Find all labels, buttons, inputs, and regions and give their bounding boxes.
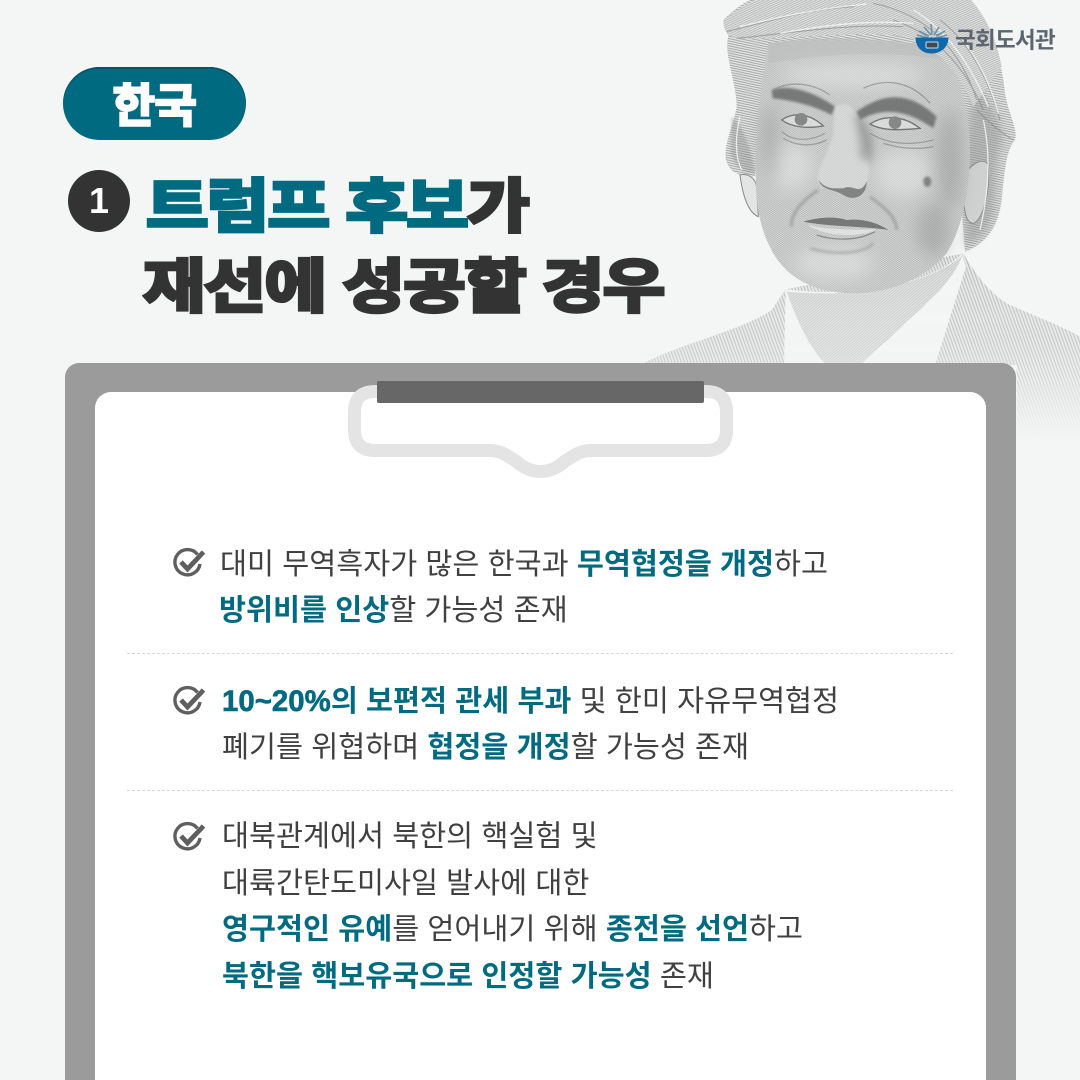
item 2 text: 10~20%의 보편적 관세 부과 및 한미 자유무역협정	[222, 678, 839, 720]
smile folds	[792, 190, 897, 230]
check icon 2	[173, 686, 206, 715]
item 1 text: 대미 무역흑자가 많은 한국과 무역협정을 개정하고	[220, 541, 828, 583]
eye bags and wrinkles	[773, 83, 933, 148]
item 2	[173, 678, 839, 766]
portrait illustration	[644, 0, 1080, 424]
mouth	[803, 218, 888, 239]
nose	[818, 104, 873, 198]
number badge	[68, 170, 130, 232]
category pill	[63, 67, 246, 140]
hair shadow side	[965, 83, 1003, 248]
item 3	[173, 813, 803, 995]
face	[756, 40, 970, 293]
item 3: 영구적인 유예를 얻어내기 위해 종전을 선언하고	[222, 906, 803, 948]
title	[142, 159, 664, 324]
hair strands	[727, 3, 1013, 140]
national assembly library logo	[916, 23, 1056, 55]
clipboard panel	[65, 363, 1016, 1080]
item 1: 방위비를 인상할 가능성 존재	[219, 587, 568, 629]
check icon 1	[173, 548, 206, 577]
item 2: 폐기를 위협하며 협정을 개정할 가능성 존재	[222, 724, 749, 766]
check icon 3	[173, 822, 206, 851]
forehead band	[768, 38, 943, 63]
logo text: 국회도서관	[955, 23, 1055, 55]
chin	[810, 243, 873, 253]
eyes	[782, 113, 920, 130]
suit and shirt	[644, 254, 1080, 424]
cheek highlights	[767, 62, 932, 280]
item 1	[173, 541, 828, 629]
cheek mole shadow	[923, 176, 931, 187]
clipboard paper	[95, 392, 986, 1080]
item 3 text: 대북관계에서 북한의 핵실험 및	[222, 813, 598, 855]
hair back	[723, 0, 1016, 252]
category label: 한국	[113, 70, 196, 136]
badge number: 1	[89, 180, 109, 221]
clipboard clip	[348, 381, 733, 478]
eyebrows	[772, 88, 937, 128]
left ear	[740, 175, 758, 217]
title line 1: 트럼프 후보가	[146, 159, 528, 244]
item 3: 대륙간탄도미사일 발사에 대한	[222, 860, 589, 902]
face shadows	[762, 103, 963, 257]
item 3: 북한을 핵보유국으로 인정할 가능성 존재	[222, 953, 714, 995]
ear	[964, 161, 989, 223]
logo emblem	[916, 24, 948, 54]
title line 2: 재선에 성공할 경우	[143, 239, 664, 324]
light hair strands	[736, 4, 998, 230]
top hair swoop	[723, 0, 1002, 107]
